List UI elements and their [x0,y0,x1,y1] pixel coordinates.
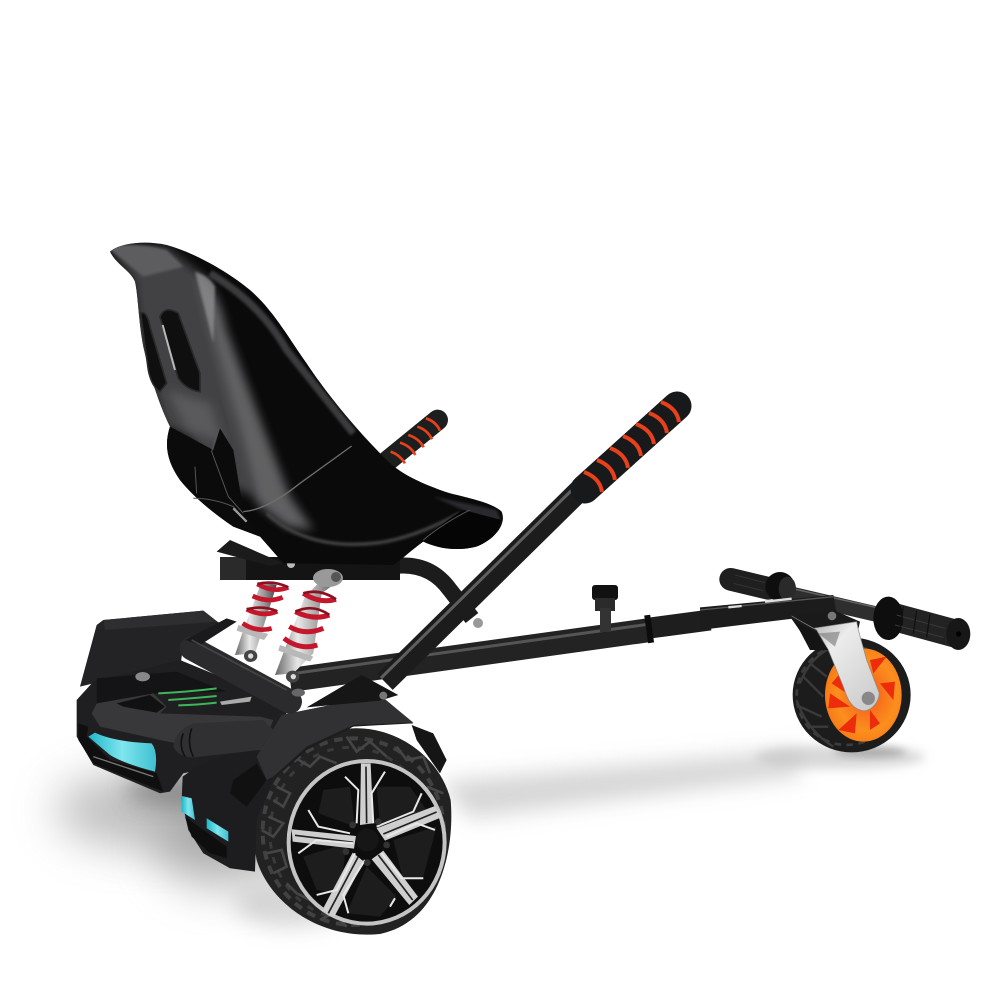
shock absorbers [235,570,340,683]
top pivot bolts [287,560,295,568]
main body [77,660,293,793]
main highlight band [197,273,313,530]
foot pad [80,611,227,687]
tube end bracket [700,595,837,630]
shock: left [235,582,288,662]
foam grip [584,402,679,492]
adjustment knob [592,585,618,632]
seat slots [141,310,200,392]
tyre [793,638,911,752]
fender and battery side [182,695,447,872]
spoke splits [295,767,437,913]
rear tube behind seat: small foam grip [387,418,440,463]
top edge sheen [210,273,353,433]
spoke accents [298,772,435,913]
seam line [243,446,352,512]
main horizontal tube [290,585,710,680]
pan sheen [267,513,460,544]
front caster wheel [792,616,911,752]
shock: right [275,570,340,683]
pockets [303,787,437,917]
seat [107,243,503,566]
rear wheel [254,728,451,935]
steering pole with foam grip [381,402,679,682]
hub [356,829,379,851]
orange hub [825,648,902,742]
green lines [158,688,262,744]
hoverboard rear [77,611,293,793]
cyan side lights [182,796,195,820]
motor housing [173,720,273,757]
support tube under seat [395,566,472,618]
seat base wedge [217,540,283,566]
spokes [292,763,442,917]
seat mount bracket [220,557,400,587]
caster plate [792,616,879,711]
right grip [873,597,970,650]
lower back panel [167,427,260,537]
front T-bar with grips [700,572,970,650]
left grip [731,572,796,601]
tyre [254,728,451,935]
crossbar and bracket [185,618,398,707]
cyan light bar [88,733,156,772]
rim disc [287,759,447,926]
ground shadow [55,745,925,927]
left grey shell [107,247,257,497]
bolt [135,672,150,681]
